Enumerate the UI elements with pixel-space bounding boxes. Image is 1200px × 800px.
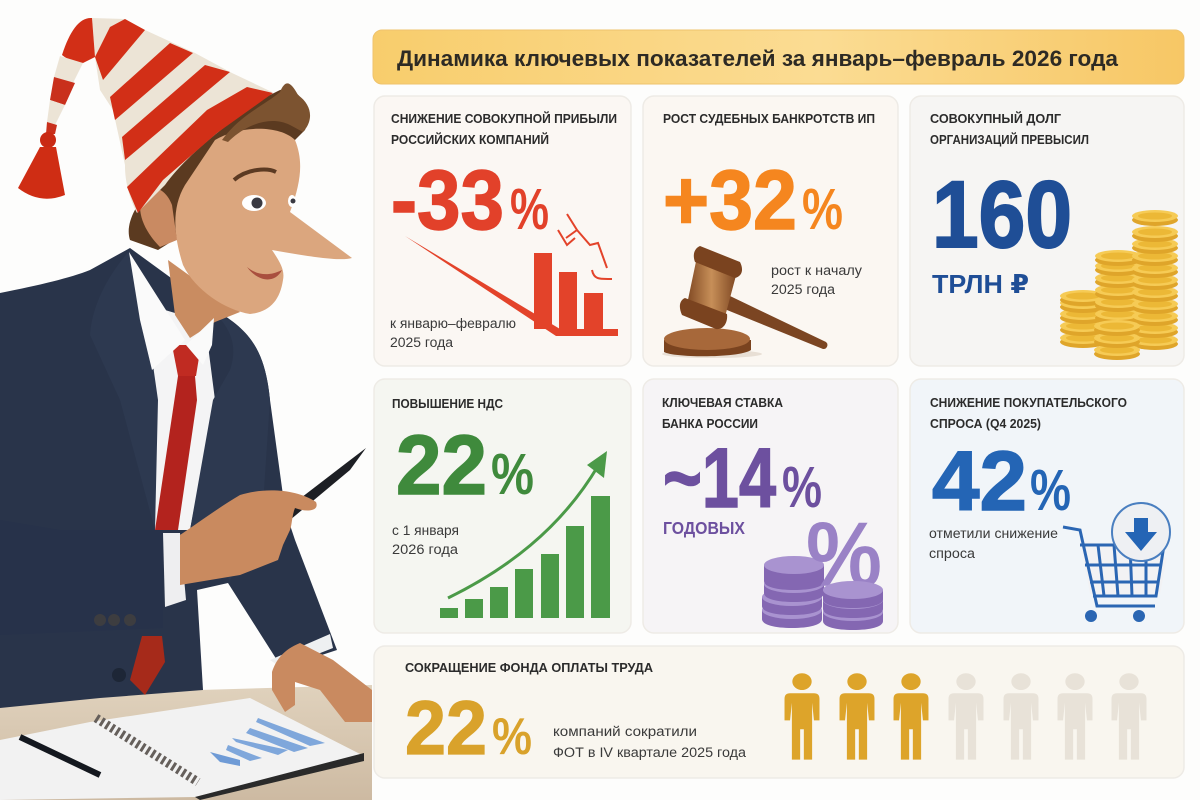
other hand and cuff xyxy=(270,634,372,722)
suit jacket xyxy=(0,248,337,708)
shirt cuff xyxy=(163,533,186,607)
illustration: man with long nose and striped hat xyxy=(0,18,372,800)
number: % xyxy=(802,177,843,242)
heading: СОВОКУПНЫЙ ДОЛГ xyxy=(930,111,1061,126)
hair front xyxy=(222,83,310,142)
title banner xyxy=(373,30,1184,84)
icon: people row xyxy=(785,673,1146,760)
number: % xyxy=(510,177,549,242)
neck and collar xyxy=(129,252,240,370)
heading: РОССИЙСКИХ КОМПАНИЙ xyxy=(391,132,549,147)
caption: 2025 года xyxy=(771,282,836,297)
panel: debt xyxy=(910,96,1184,366)
icon: coin stacks xyxy=(1060,210,1178,360)
caption: спроса xyxy=(929,546,976,561)
panel: bankruptcies xyxy=(643,96,898,366)
unit: ГОДОВЫХ xyxy=(663,518,745,538)
caption: отметили снижение xyxy=(929,526,1058,541)
heading: СПРОСА (Q4 2025) xyxy=(930,417,1041,431)
number: ~14 xyxy=(663,431,776,525)
tie xyxy=(130,345,201,695)
icon: percent and purple coins: % xyxy=(806,504,882,606)
icon: gavel xyxy=(662,246,827,358)
mouth xyxy=(247,267,282,279)
heading: СОКРАЩЕНИЕ ФОНДА ОПЛАТЫ ТРУДА xyxy=(405,661,653,675)
heading: СНИЖЕНИЕ СОВОКУПНОЙ ПРИБЫЛИ xyxy=(391,111,617,126)
hand with pen xyxy=(180,448,366,585)
number: 160 xyxy=(932,162,1072,268)
panel: VAT xyxy=(374,379,631,633)
panel: demand xyxy=(910,379,1184,633)
notebook xyxy=(0,698,364,800)
table xyxy=(0,685,372,800)
number: -33 xyxy=(391,153,504,247)
eye and brow xyxy=(234,170,296,211)
unit: ТРЛН ₽ xyxy=(932,269,1029,299)
rising bar chart xyxy=(440,451,610,618)
caption: рост к началу xyxy=(771,263,862,278)
icon: shopping cart xyxy=(1063,503,1170,622)
number: % xyxy=(782,455,822,520)
panel: payroll xyxy=(374,646,1184,778)
number: +32 xyxy=(663,153,797,247)
number: 22 xyxy=(396,418,487,512)
heading: РОСТ СУДЕБНЫХ БАНКРОТСТВ ИП xyxy=(663,112,875,126)
number: % xyxy=(492,708,532,766)
panel: profit decline xyxy=(374,96,631,366)
hat xyxy=(18,18,273,213)
heading: КЛЮЧЕВАЯ СТАВКА xyxy=(662,396,783,410)
panel: key rate xyxy=(643,379,898,633)
number: % xyxy=(491,442,534,507)
heading: СНИЖЕНИЕ ПОКУПАТЕЛЬСКОГО xyxy=(930,396,1127,410)
face xyxy=(175,129,352,314)
heading: БАНКА РОССИИ xyxy=(662,417,758,431)
number: % xyxy=(1030,458,1071,523)
heading: ОРГАНИЗАЦИЙ ПРЕВЫСИЛ xyxy=(930,132,1089,147)
icon: percent and purple coins xyxy=(762,504,883,630)
falling chart xyxy=(405,214,618,336)
caption: 2025 года xyxy=(390,335,453,350)
caption: ФОТ в IV квартале 2025 года xyxy=(553,745,747,760)
caption: к январю–февралю xyxy=(390,316,516,331)
ear xyxy=(140,188,177,247)
heading: ПОВЫШЕНИЕ НДС xyxy=(392,397,503,411)
caption: 2026 года xyxy=(392,542,459,557)
caption: компаний сократили xyxy=(553,724,697,739)
title banner: Динамика ключевых показателей за январь–февраль 2026 года xyxy=(397,46,1119,71)
number: 22 xyxy=(405,686,487,771)
back hair xyxy=(129,89,307,250)
number: 42 xyxy=(932,434,1027,528)
caption: с 1 января xyxy=(392,523,459,538)
